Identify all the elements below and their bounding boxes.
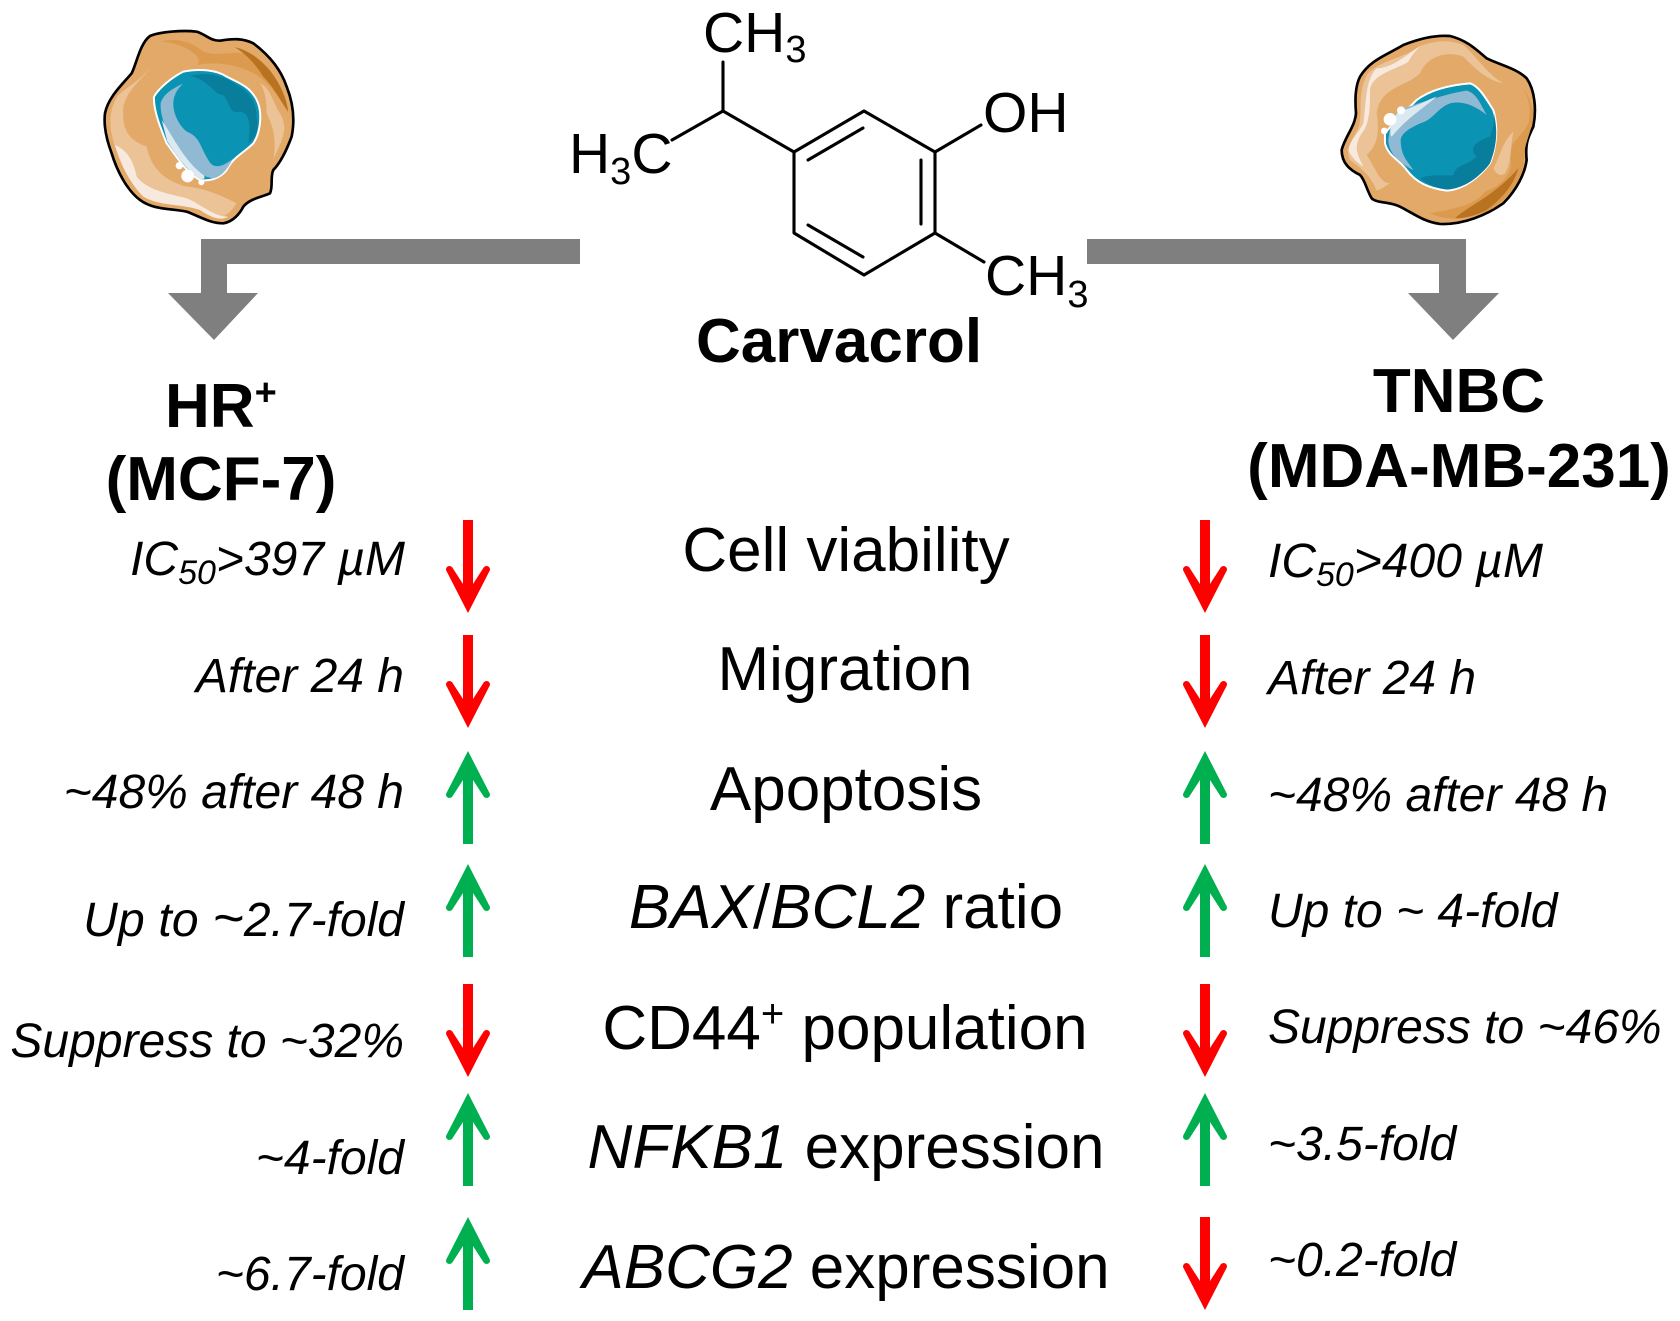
HR+ values: Suppress to ~32% bbox=[10, 1015, 404, 1068]
arrow: carvacrol to TNBC bbox=[1087, 239, 1499, 340]
chemical structure: carvacrol: OH bbox=[983, 81, 1068, 145]
row labels bbox=[578, 516, 1110, 1302]
row labels: Migration bbox=[718, 635, 972, 704]
HR+ values: ~6.7-fold bbox=[216, 1248, 405, 1301]
chemical structure: carvacrol: CH bbox=[985, 244, 1067, 308]
heading: TNBC MDA-MB-231: TNBC bbox=[1373, 357, 1545, 426]
chemical structure: carvacrol: 3 bbox=[1067, 274, 1088, 316]
TNBC values: After 24 h bbox=[1265, 652, 1476, 705]
chemical structure: carvacrol: CH bbox=[703, 1, 785, 65]
row labels: CD44 bbox=[602, 994, 761, 1063]
chemical structure: carvacrol bbox=[569, 1, 1088, 316]
HR+ values: ~4-fold bbox=[256, 1132, 405, 1185]
TNBC values: IC bbox=[1268, 535, 1316, 588]
icon: HR+ cancer cell bbox=[105, 31, 293, 223]
chemical structure: carvacrol: 3 bbox=[610, 151, 631, 193]
HR+ values: IC bbox=[130, 533, 178, 586]
chemical structure: carvacrol: C bbox=[631, 122, 672, 186]
heading: HR+ MCF-7: + bbox=[255, 372, 277, 414]
row labels: + bbox=[761, 992, 784, 1036]
HR+ values: After 24 h bbox=[193, 650, 404, 703]
chemical structure: carvacrol: 3 bbox=[785, 29, 806, 71]
TNBC values: ~3.5-fold bbox=[1268, 1118, 1457, 1171]
heading: HR+ MCF-7: HR bbox=[165, 372, 255, 441]
TNBC values bbox=[1265, 535, 1662, 1287]
TNBC values: ~0.2-fold bbox=[1268, 1234, 1457, 1287]
HR+ direction arrows bbox=[446, 520, 490, 1310]
TNBC values: >400 µM bbox=[1354, 535, 1543, 588]
compound name: Carvacrol bbox=[696, 307, 982, 376]
HR+ values bbox=[10, 533, 405, 1301]
icon: TNBC cancer cell bbox=[1342, 36, 1535, 224]
HR+ values: 50 bbox=[178, 554, 216, 592]
TNBC values: 50 bbox=[1316, 556, 1354, 594]
heading: HR+ MCF-7: (MCF-7) bbox=[106, 445, 336, 514]
heading: HR+ MCF-7 bbox=[106, 372, 336, 514]
arrow: carvacrol to HR+ bbox=[168, 239, 580, 340]
TNBC direction arrows bbox=[1183, 520, 1227, 1310]
row labels: NFKB1 expression bbox=[588, 1113, 1104, 1182]
row labels: ABCG2 expression bbox=[578, 1233, 1110, 1302]
TNBC values: Up to ~ 4-fold bbox=[1268, 885, 1559, 938]
TNBC values: ~48% after 48 h bbox=[1268, 769, 1608, 822]
chemical structure: carvacrol: H bbox=[569, 122, 610, 186]
HR+ values: Up to ~2.7-fold bbox=[83, 888, 405, 948]
row labels: population bbox=[784, 994, 1088, 1063]
TNBC values: Suppress to ~46% bbox=[1268, 1001, 1662, 1054]
heading: TNBC MDA-MB-231: (MDA-MB-231) bbox=[1247, 432, 1671, 501]
heading: TNBC MDA-MB-231 bbox=[1247, 357, 1671, 501]
HR+ values: >397 µM bbox=[216, 533, 405, 586]
row labels: BAX/BCL2 ratio bbox=[629, 873, 1063, 942]
row labels: Cell viability bbox=[682, 516, 1010, 585]
HR+ values: ~48% after 48 h bbox=[64, 766, 404, 819]
row labels: Apoptosis bbox=[710, 755, 982, 824]
